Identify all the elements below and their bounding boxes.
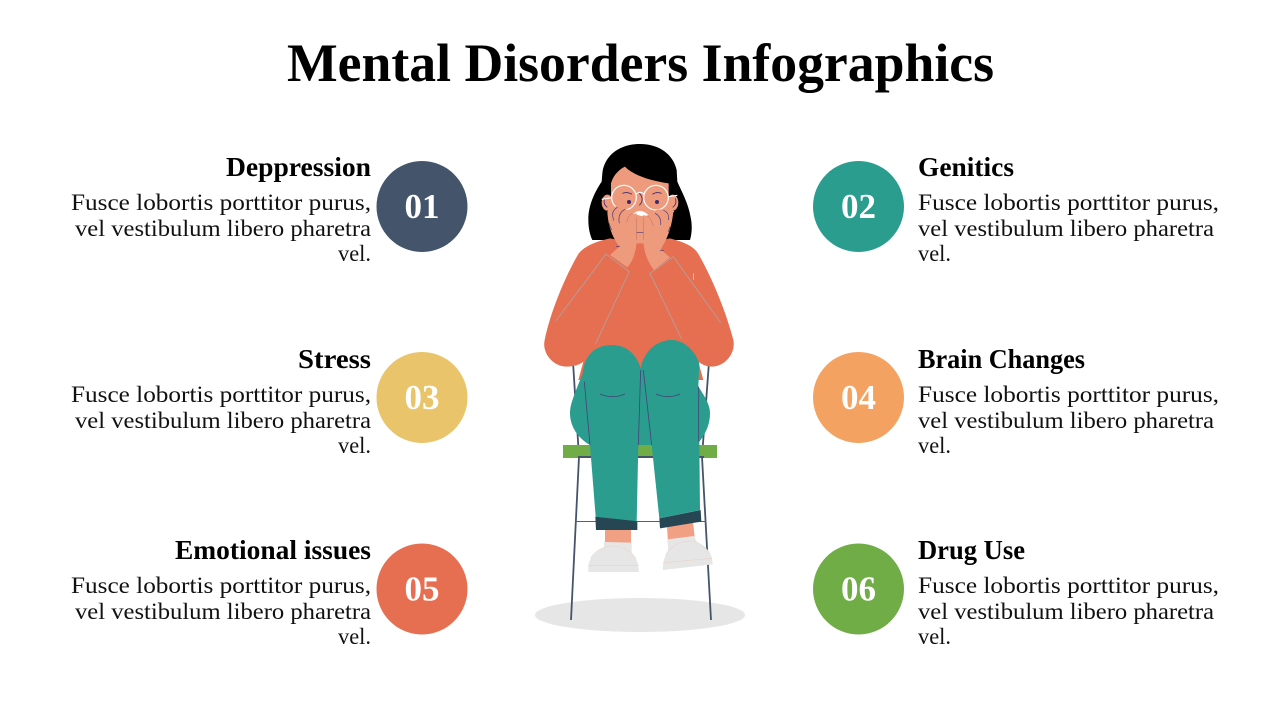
item 06: Drug Use bbox=[813, 535, 1219, 650]
hands bbox=[607, 207, 673, 270]
item 05: Emotional issues: Emotional issues bbox=[175, 535, 371, 565]
item 03: Stress: Fusce lobortis porttitor purus, bbox=[71, 382, 371, 408]
trousers bbox=[570, 340, 710, 522]
item 06: Drug Use: 06 bbox=[841, 570, 876, 608]
item 06: Drug Use: vel vestibulum libero pharetra bbox=[918, 599, 1215, 625]
stool bbox=[563, 362, 717, 620]
item 02: Genitics: vel vestibulum libero pharetra bbox=[918, 216, 1215, 242]
item 04: Brain Changes: 04 bbox=[841, 378, 876, 417]
item 03: Stress bbox=[71, 344, 468, 459]
item 05: Emotional issues: vel. bbox=[338, 624, 371, 650]
item 02: Genitics bbox=[813, 152, 1219, 267]
shoes bbox=[588, 536, 713, 572]
ears bbox=[602, 195, 613, 211]
floor shadow bbox=[535, 598, 745, 632]
facial features bbox=[604, 193, 676, 216]
face bbox=[611, 167, 669, 245]
ankles bbox=[605, 518, 695, 545]
glasses bbox=[602, 185, 677, 210]
item 05: Emotional issues: Fusce lobortis porttitor purus, bbox=[71, 573, 371, 599]
item 04: Brain Changes: Fusce lobortis porttitor purus, bbox=[918, 382, 1219, 408]
item 04: Brain Changes: Brain Changes bbox=[918, 344, 1085, 374]
item 03: Stress: vel vestibulum libero pharetra bbox=[75, 408, 372, 434]
item 02: Genitics: Genitics bbox=[918, 152, 1014, 182]
item 01: Deppression: vel. bbox=[338, 241, 371, 267]
cuffs bbox=[595, 510, 701, 530]
title: Mental Disorders Infographics bbox=[287, 33, 994, 93]
item 02: Genitics: Fusce lobortis porttitor purus, bbox=[918, 190, 1219, 216]
item 01: Deppression: Deppression bbox=[226, 152, 371, 182]
item 06: Drug Use: Drug Use bbox=[918, 535, 1025, 565]
item 02: Genitics: 02 bbox=[841, 187, 876, 226]
item 05: Emotional issues: vel vestibulum libero pharetra bbox=[75, 599, 372, 625]
sleeve seams bbox=[556, 254, 721, 344]
item 04: Brain Changes: vel. bbox=[918, 433, 951, 459]
illustration: worried woman sitting on a stool bbox=[535, 144, 745, 632]
trouser seams bbox=[584, 370, 699, 445]
sweater bbox=[544, 238, 734, 380]
item 05: Emotional issues: 05 bbox=[404, 570, 440, 608]
item 05: Emotional issues bbox=[71, 535, 468, 650]
legs and shoes bbox=[570, 340, 713, 572]
item 06: Drug Use: Fusce lobortis porttitor purus, bbox=[918, 573, 1219, 599]
finger lines bbox=[609, 207, 670, 250]
item 04: Brain Changes bbox=[813, 344, 1219, 459]
item 03: Stress: Stress bbox=[298, 344, 371, 374]
item 01: Deppression: vel vestibulum libero pharetra bbox=[75, 216, 372, 242]
hair bbox=[588, 144, 692, 240]
item 04: Brain Changes: vel vestibulum libero pharetra bbox=[918, 408, 1215, 434]
item 03: Stress: 03 bbox=[404, 378, 440, 417]
item 01: Deppression: 01 bbox=[404, 187, 440, 226]
item 01: Deppression: Fusce lobortis porttitor purus, bbox=[71, 190, 371, 216]
item 03: Stress: vel. bbox=[338, 433, 371, 459]
item 01: Deppression bbox=[71, 152, 468, 267]
item 06: Drug Use: vel. bbox=[918, 624, 951, 650]
item 02: Genitics: vel. bbox=[918, 241, 951, 267]
